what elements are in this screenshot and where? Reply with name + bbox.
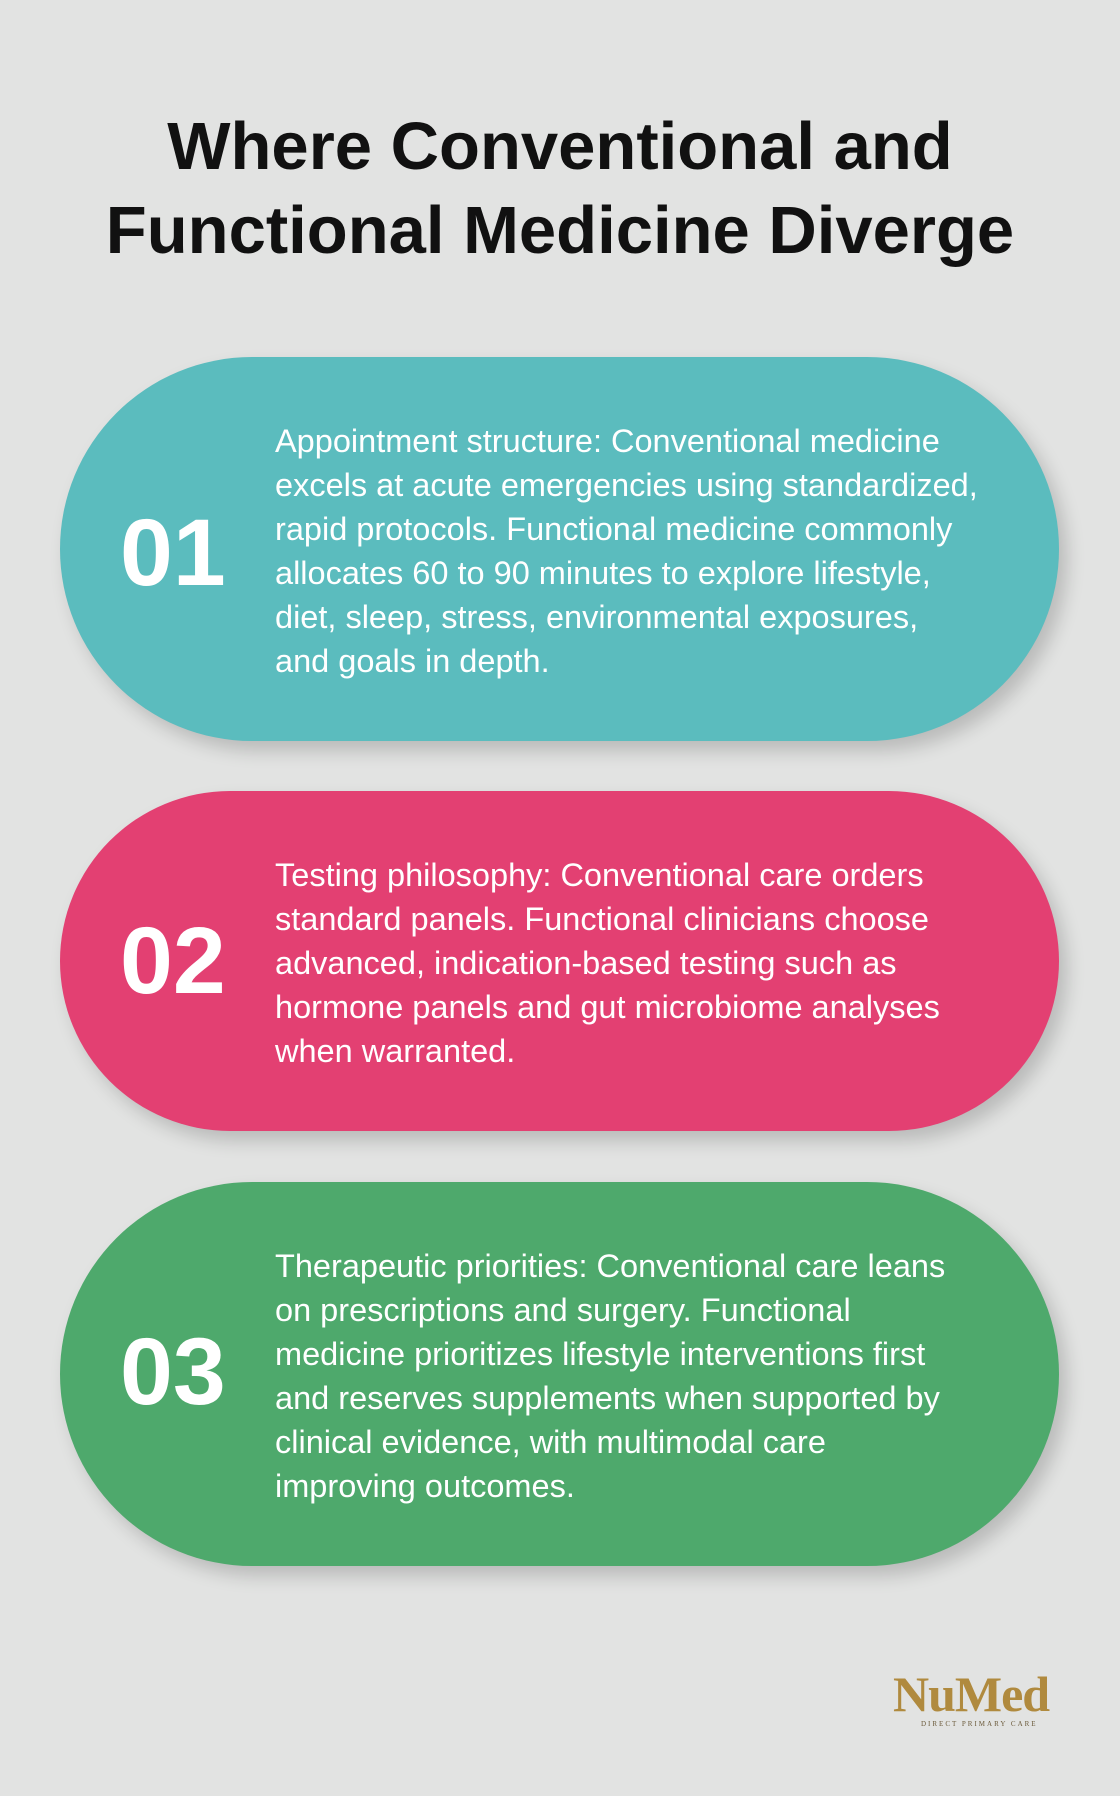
logo: NuMed [893,1666,1049,1722]
title [106,109,1014,268]
text: testing philosophy: hormone panels and gut microbiome analyses [275,989,940,1025]
text: therapeutic priorities: clinical evidence, with multimodal care [275,1424,826,1460]
text: appointment structure: rapid protocols. Functional medicine commonly [275,511,952,547]
text: therapeutic priorities: Therapeutic priorities: Conventional care leans [275,1248,945,1284]
number 01: 01 [120,500,226,606]
panel: therapeutic priorities [60,1182,1059,1566]
text: therapeutic priorities: and reserves supplements when supported by [275,1380,940,1416]
logo: DIRECT PRIMARY CARE [921,1720,1038,1728]
title: Where Conventional and [167,109,953,184]
text: therapeutic priorities: on prescriptions and surgery. Functional [275,1292,851,1328]
text: testing philosophy: when warranted. [275,1033,515,1069]
text: appointment structure [275,423,978,679]
text: appointment structure: Appointment structure: Conventional medicine [275,423,940,459]
text: therapeutic priorities [275,1248,945,1504]
text: therapeutic priorities: medicine prioritizes lifestyle interventions first [275,1336,925,1372]
panel: testing philosophy [60,791,1059,1131]
text: appointment structure: allocates 60 to 90 minutes to explore lifestyle, [275,555,931,591]
text: therapeutic priorities: improving outcomes. [275,1468,575,1504]
panel: appointment structure [60,357,1059,741]
text: appointment structure: diet, sleep, stress, environmental exposures, [275,599,918,635]
text: testing philosophy: standard panels. Functional clinicians choose [275,901,929,937]
text: testing philosophy: advanced, indication-based testing such as [275,945,897,981]
text: appointment structure: excels at acute emergencies using standardized, [275,467,978,503]
text: testing philosophy: Testing philosophy: Conventional care orders [275,857,924,893]
text: appointment structure: and goals in depth. [275,643,550,679]
title: Functional Medicine Diverge [106,193,1014,268]
number 03: 03 [120,1319,226,1425]
text: testing philosophy [275,857,940,1069]
number 02: 02 [120,908,226,1014]
